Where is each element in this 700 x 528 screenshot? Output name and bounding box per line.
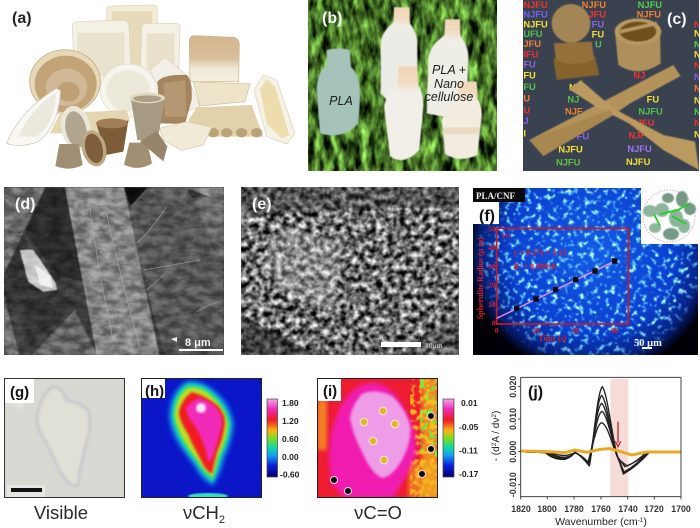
panel i: C=O heat map [317,378,479,498]
caption: CH2 stretch: νCH [183,502,219,523]
label g: (g) [10,384,29,401]
x tick labels: 1720 [644,504,664,514]
y tick labels: 0.020 [508,376,518,398]
NJFU background text: U [523,105,530,115]
red arrow [615,422,621,447]
panel e: SEM of fracture surface [241,187,459,355]
orange markers [360,407,399,464]
growth plot overlay: 40 [572,326,579,335]
x tick labels: 1780 [564,504,584,514]
colour bar i [443,398,479,479]
label h: (h) [145,383,164,400]
panel b: grass background with bottles [308,0,497,171]
NJFU background text: UFU [523,29,543,39]
NJFU background text: NJFU [627,144,652,154]
NJFU background text: NJFU [523,0,548,10]
growth plot overlay: Time (s) [538,334,567,343]
NJFU background text: U [523,94,530,104]
growth plot overlay: 0 [495,326,499,335]
panel j: second-derivative spectra [491,376,691,528]
highlighted band [610,379,628,497]
NJFU background text: NJFU [637,10,661,20]
plot frame and ticks [518,377,681,499]
y tick labels [508,376,518,497]
panel c: 3D printed objects on NJFU paper [523,0,700,171]
label f [473,202,499,225]
scale bar f: 50 μm [634,338,662,349]
growth plot overlay: 0 [492,319,496,328]
y tick labels: -0.010 [508,472,518,497]
x tick labels: 1800 [537,504,557,514]
growth plot overlay: R² = 0.99916 [513,262,556,271]
bottle text: PLA [329,94,353,108]
growth plot overlay: 30 [488,262,496,271]
growth plot overlay [476,225,628,343]
y tick labels: 0.000 [508,441,518,463]
label f: (f) [479,208,495,225]
scale bar g [11,488,42,492]
NJFU background text: NJ [567,94,579,104]
NJFU background text: NJFU [556,158,581,168]
label d: (d) [15,196,35,213]
growth plot overlay: 20 [488,281,496,290]
NJFU background text: NJFU [523,10,548,20]
NJFU background text: IFU [523,49,539,59]
panel g: visible image [4,378,125,498]
colour bar h: 0.00 [282,452,299,462]
label c: (c) [667,11,687,28]
x tick labels: 1700 [671,504,691,514]
PLA/CNF tag: PLA/CNF [476,191,515,201]
scale bar e: 10μm [425,341,443,350]
NJFU background text: JFU [523,39,541,49]
black spectra [521,387,681,474]
x tick labels [511,504,691,514]
growth plot overlay: 40 [488,243,496,252]
NJFU background text: NJFU [638,106,663,116]
x tick labels: 1760 [591,504,611,514]
colour bar h: 0.60 [282,434,299,444]
NJFU background text: JFU [588,10,606,20]
colour bar i: -0.05 [459,422,479,432]
NJFU background text: FU [577,131,589,141]
colour bar h: 1.80 [282,398,299,408]
growth plot overlay: 60 [611,326,619,335]
y axis title: ) [491,411,502,414]
yellow spectra [521,449,681,455]
scale bar d: 8 μm [185,337,211,349]
colour bar i: 0.01 [461,398,478,408]
NJFU background text: FU [647,94,659,104]
NJFU background text: I [523,129,526,139]
panel f: polarized micrograph with growth plot [473,188,698,355]
label e: (e) [252,196,272,213]
label i: (i) [323,383,337,400]
NJFU background text: FU [592,19,604,29]
bottle text: Nano [434,77,464,91]
NJFU background text: NJFU [626,157,651,167]
x axis title: ) [643,516,647,528]
NJFU background text: NJ [633,70,645,80]
x axis title: -1 [638,517,644,524]
caption: CH2 stretch: 2 [219,514,225,526]
NJFU background text: NJF [628,131,646,141]
panel h: CH2 heat map [141,378,300,499]
PLA/CNF tag [473,188,525,202]
y tick labels: 0.010 [508,408,518,430]
scale bar e [381,342,442,350]
NJFU background text: NJ [569,83,581,93]
NJFU background text: FU [523,60,536,70]
NJFU background text: FU [523,70,536,80]
NJFU background text: NJFU [523,19,548,29]
growth plot overlay: (c) [502,231,511,240]
x tick labels: 1820 [511,504,531,514]
y axis title: - (d [491,446,502,461]
colour bar i: -0.11 [459,446,478,456]
caption: Visible: Visible [34,502,88,523]
NJFU background text: J [523,116,529,126]
NJFU background text: NJFU [630,118,655,128]
growth plot overlay: 50 [488,225,496,234]
NJFU background text: NJFU [582,0,606,10]
colour bar i: -0.17 [459,469,479,479]
NJFU background text: FU [523,82,536,92]
y axis title: 2 [491,442,498,446]
label b: (b) [322,10,342,27]
NJFU background text: U [595,39,602,49]
NJFU background text: NJFU [558,145,583,155]
NJFU background text: NJ [637,19,649,29]
growth plot overlay: y = 0.27x + 3.12 [513,248,566,257]
colour bar h [267,398,300,480]
NJFU background text: NJF [565,106,583,116]
colour bar h: 1.20 [282,416,299,426]
y axis title: A / dν [491,418,502,443]
inset: molecular model [641,188,698,244]
growth plot overlay: 20 [532,326,540,335]
x tick labels: 1740 [618,504,638,514]
colour bar h: -0.60 [280,470,300,480]
panel d: SEM of cellulose fibres [4,187,224,355]
label j: (j) [528,384,543,401]
NJFU background text [523,0,700,168]
panel a: moulded pulp packaging [7,5,295,169]
label a: (a) [12,10,32,27]
bottle text [330,65,473,105]
NJFU background text: NJFU [638,0,662,10]
y axis title: 2 [491,414,498,418]
caption: C=O stretch: νC=O [354,502,402,523]
bottle text: PLA + [432,63,466,77]
black markers [330,412,434,494]
scale bar d [171,337,223,351]
growth plot overlay: 10 [488,300,496,309]
NJFU background text: FU [592,29,604,39]
bottle text: cellulose [425,90,473,104]
growth plot overlay: Spherulite Radius (μ m) [476,237,485,319]
x axis title: Wavenumber (cm [555,516,638,528]
